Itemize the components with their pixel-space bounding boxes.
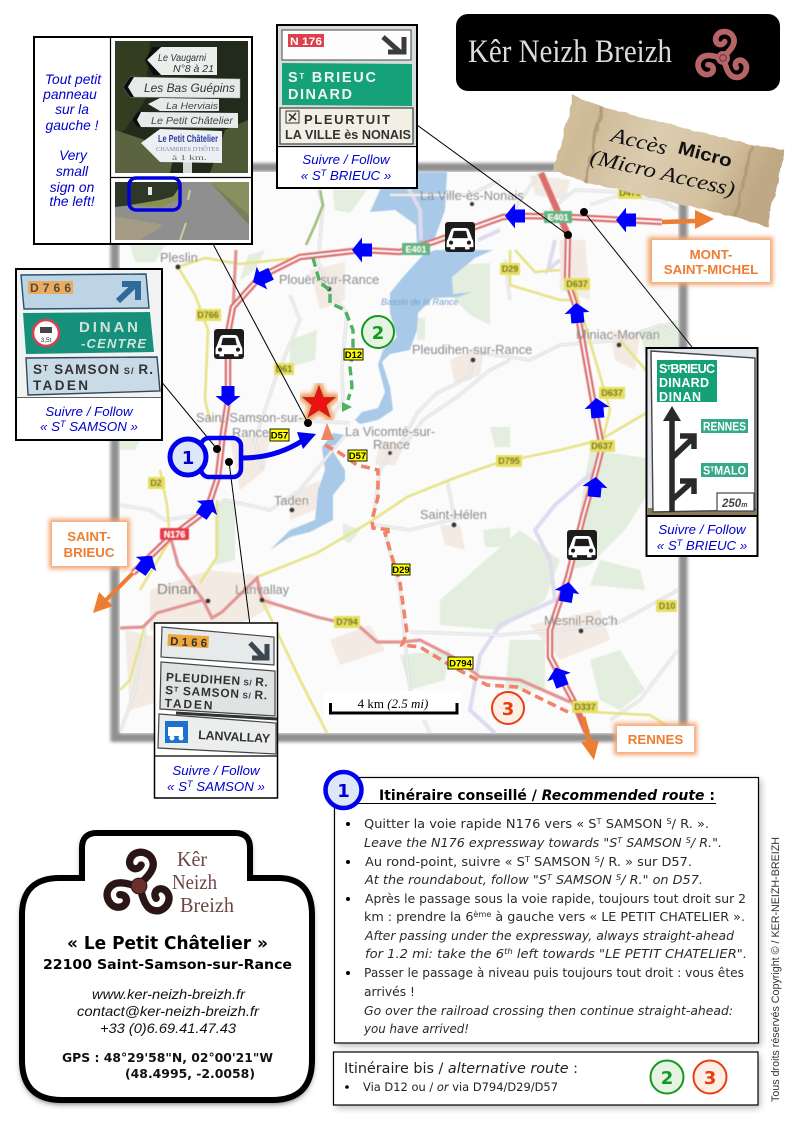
destination label: Mont-Saint-Michel: MONT- [690,247,732,262]
sign photo: TADEN [33,378,88,393]
sign photo: BRIEUC [306,70,377,86]
road number labels: D795 [498,456,520,466]
heading: Itinéraire bis / alternative route : [344,1061,578,1077]
sign photo: D166 [170,636,207,650]
map town dots [176,202,622,634]
photo: road view [115,182,249,240]
map base layers [120,172,678,733]
photo: signpost: Les Bas Guépins [144,81,235,95]
road number labels: D637 [591,441,613,451]
route steps: km : prendre la 6 [364,909,472,924]
route marker 3 [492,692,524,724]
sign photo: MALO [714,464,746,478]
destination label: Mont-Saint-Michel: SAINT-MICHEL [664,262,758,277]
sign photo: DINAN [79,319,138,336]
route steps: SAMSON [622,835,686,850]
sign photo: PLEUDIHEN S/ R. [166,670,268,689]
grey roads [120,172,678,733]
sign photo: 250m [721,498,747,510]
alternative route 3: orange dashed line [321,423,568,712]
GPS coordinates [62,1051,273,1081]
route steps: After passing under the expressway, always straight-ahead [364,928,734,943]
logo wordmark: Kêr Neizh Breizh [468,34,672,70]
route steps: Leave the N176 expressway towards "S [364,835,613,850]
route steps [363,816,747,1036]
route steps: SAMSON [552,872,616,887]
place names: Lanvallay [235,582,290,597]
caption: SAMSON » [193,779,265,794]
place names [157,188,660,628]
route steps: Passer le passage à niveau puis toujours tout droit : vous êtes [364,965,744,980]
bullets [346,822,350,975]
legend marker 2: 2 [661,1068,673,1089]
sign photo [158,627,277,754]
note text: sign on [50,180,95,195]
route steps: S [616,873,621,882]
photo: signpost: Le Vaugarni [158,53,207,64]
legend marker 3 [694,1060,726,1094]
caption: Suivre / Follow [658,522,747,537]
destination label: Saint-Brieuc [49,519,130,569]
house name: « Le Petit Châtelier » [67,933,268,954]
place names: Rance [373,437,410,452]
sign photo: BRIEUC [670,362,715,376]
panel: recommended route [326,772,761,1046]
road number labels: E401 [405,244,427,254]
sign photo: T [710,466,715,474]
route marker 2 [362,316,394,348]
place names: Mesnil-Roc'h [544,613,618,628]
heading: Itinéraire conseillé / Recommended route : [379,788,715,804]
destination label: Saint-Brieuc: SAINT- [67,529,111,544]
note text: gauche ! [46,118,99,133]
destination label: Mont-Saint-Michel [648,237,773,285]
sign photo: T [667,365,672,372]
yellow route labels: D29 [392,565,410,576]
route marker 1: 1 [337,781,350,802]
panel: follow St Samson, D166 [154,623,278,798]
yellow route labels: D794 [449,658,473,670]
yellow roads [120,250,678,733]
highlight frame [129,178,180,210]
route steps: T [524,855,530,864]
logo wordmark: Kêr [177,847,207,871]
destination label: Saint-Brieuc: BRIEUC [64,545,115,560]
sign photo: S/ R. [124,362,153,377]
place names: La Vicomté-sur- [345,424,435,439]
road number labels: D637 [601,388,623,398]
GPS coordinates: (48.4995, -2.0058) [125,1067,255,1081]
main route highlight with marker 1: 1 [182,448,194,469]
route steps: T [547,873,553,882]
caption: T [60,419,67,429]
note text [42,72,102,209]
route steps: for 1.2 mi: take the 6 [365,946,498,961]
legend marker 3: 3 [704,1068,716,1089]
place names: Taden [274,493,309,508]
scroll heading: (Micro Access) [588,144,737,201]
caption: Suivre / Follow [45,404,134,419]
sign photo: SAMSON [179,684,239,701]
olive road [306,190,323,245]
road number labels: D794 [336,617,358,627]
sign photo: LANVALLAY [198,728,271,746]
note text: panneau [42,87,97,102]
main road centre line [133,216,662,700]
route steps: SAMSON [602,816,666,831]
green areas [120,190,678,710]
connector lines [160,125,692,625]
route steps: Quitter la voie rapide N176 vers « S [364,816,588,831]
route steps: SAMSON [530,854,595,869]
postal address: 22100 Saint-Samson-sur-Rance [43,957,292,973]
route steps: th [504,947,513,956]
photo: signpost: CHAMBRES D'HÔTES [156,145,219,153]
sign photo: TADEN [164,696,213,713]
panel: alternative route [334,1052,760,1108]
route steps: / R.". [690,835,722,850]
sign photo: S/ R. [242,688,267,702]
destination label: Rennes: RENNES [628,732,683,747]
main route highlight with marker 1 [170,432,316,477]
road number labels: D337 [574,702,596,712]
road number labels: N176 [164,530,185,540]
road number labels [148,187,677,713]
connector anchor dots [213,208,588,466]
sign photo: S [703,464,711,478]
sign photo: T [299,72,304,81]
panel: follow St Samson, D766 [16,269,162,440]
blue direction arrows [130,204,636,691]
route steps: At the roundabout, follow "S [365,872,542,887]
route steps: / R. » sur D57. [600,854,692,869]
sign photo: SAMSON [49,362,119,377]
sign photo: T [174,686,179,694]
route steps: ème [473,909,491,919]
road number labels: D2 [150,478,162,488]
scale bar: 4 km (2.5 mi) [358,696,428,711]
sign photo: T [43,364,48,373]
caption: « S [40,419,60,434]
caption: BRIEUC » [326,168,391,183]
place names: Pleslin [160,250,198,265]
logo wordmark: Breizh [180,893,234,917]
route steps: S [595,855,600,864]
scale bar [324,691,461,720]
photo: signpost [115,41,248,173]
sign photo: S [33,362,42,377]
road number labels: D29 [502,264,518,274]
destination label: Rennes [614,723,697,755]
sign photo: LA VILLE ès NONAIS [285,128,411,142]
sign photo: N 176 [290,36,322,48]
bullet point [345,1085,349,1089]
destination star [302,385,336,418]
route steps: Après le passage sous la voie rapide, toujours tout droit sur 2 [365,891,746,906]
photo: signpost: Le Petit Châtelier [158,134,218,145]
GPS coordinates: GPS : 48°29'58"N, 02°00'21"W [62,1051,273,1065]
note text: small [56,164,89,179]
place names: Dinan [157,581,196,598]
sign photo [648,349,756,515]
route marker 3: 3 [502,699,514,720]
route steps: / R." on D57. [620,872,703,887]
route steps: T [595,817,602,826]
road number labels: D475 [619,188,641,198]
road number labels: D61 [276,364,292,374]
photo: signpost: Le Petit Châtelier [151,116,234,127]
route steps: arrivés ! [364,984,415,999]
note text: sur la [55,102,89,117]
orange exit arrows [93,210,714,760]
water [270,172,493,550]
caption [301,152,391,183]
route marker 2: 2 [372,323,384,344]
panel: follow St Brieuc, D637 [646,348,758,556]
caption: « S [657,538,677,553]
road number labels: D766 [197,310,219,320]
sign photo [17,270,161,397]
yellow route labels: D12 [345,350,362,361]
main road casing [133,173,662,733]
sign photo: S [659,362,667,376]
photo: signpost: N°8 à 21 [173,64,214,75]
route steps: you have arrived! [363,1021,469,1036]
scroll heading: Accès [607,122,670,160]
place names: Saint-Samson-sur- [196,410,303,425]
yellow route labels: D57 [271,430,288,442]
note text: Very [59,148,88,163]
caption: Suivre / Follow [302,152,391,167]
caption [40,404,138,434]
route marker 1 [326,772,362,808]
note text: the left! [49,194,95,209]
web and phone [77,986,260,1036]
caption: T [321,168,328,178]
caption: SAMSON » [66,419,138,434]
scroll banner: access title [552,95,785,227]
photo: signpost: La Herviais [166,101,218,112]
place names: La Ville-ès-Nonais [420,188,524,203]
note text: Tout petit [45,72,102,87]
route steps: Go over the railroad crossing then continue straight-ahead: [364,1003,733,1018]
sign photo: -CENTRE [81,336,146,351]
road number labels: E401 [547,212,569,222]
yellow route labels [270,349,473,670]
sign photo: D766 [30,281,71,295]
place names: Bassin de la Rance [381,297,459,307]
panel: follow St Brieuc, N176 [277,25,417,188]
logo banner [456,14,780,91]
road number labels: D10 [659,601,675,611]
sign photo: 3,5t [41,337,52,344]
scroll heading [588,122,737,201]
caption: Suivre / Follow [172,763,261,778]
sign photo: DINAN [659,390,701,404]
panel: address and contact [22,833,312,1103]
pink secondary roads [120,250,570,702]
route steps: left towards "LE PETIT CHATELIER". [513,946,747,961]
logo wordmark [172,847,234,917]
triskel logo [103,852,173,915]
route list: Via D12 ou / or via D794/D29/D57 [363,1080,558,1094]
place names: Rance [232,425,269,440]
logo wordmark: Neizh [172,870,217,894]
route steps: / R. ». [672,816,709,831]
legend marker 2 [650,1060,684,1094]
sign photo: DINARD [288,87,352,103]
photo: signpost: à 1 km. [172,154,207,162]
caption [657,522,747,553]
place names: Pleudihen-sur-Rance [412,342,532,357]
place names: Plouër-sur-Rance [279,272,379,287]
sign photo [278,26,416,146]
route steps: Au rond-point, suivre « S [365,854,520,869]
route steps: S [686,836,691,845]
yellow route labels: D57 [349,451,366,462]
road number labels: D637 [566,279,588,289]
scroll heading: Micro [676,138,734,171]
canal line [400,172,595,733]
sign photo: PLEURTUIT [304,112,390,127]
alternative route 2: green dashed line [313,258,353,412]
copyright notice: Tous droits réservés Copyright © / KER-NEIZH-BREIZH [770,837,782,1102]
sign photo: DINARD [659,376,709,390]
route steps: à gauche vers « LE PETIT CHATELIER ». [491,909,745,924]
route steps: T [617,836,623,845]
caption: BRIEUC » [682,538,747,553]
sign photo: S [288,70,298,86]
web and phone: +33 (0)6.69.41.47.43 [100,1020,236,1036]
car icons [214,222,597,560]
sign photo: S [165,683,174,697]
caption: « S [167,779,187,794]
map [115,168,683,738]
route steps: S [666,817,672,826]
web and phone: contact@ker-neizh-breizh.fr [77,1003,260,1019]
town areas [125,175,640,710]
caption: T [677,538,684,548]
caption [167,763,265,794]
map frame [115,168,683,738]
sign photo: RENNES [703,420,746,434]
caption: « S [301,168,321,183]
caption: T [187,779,194,789]
place names: Miniac-Morvan [576,327,660,342]
logo triskel [695,32,750,81]
web and phone: www.ker-neizh-breizh.fr [92,986,246,1002]
panel: small sign on the left [34,37,252,244]
place names: Saint-Hélen [420,507,487,522]
